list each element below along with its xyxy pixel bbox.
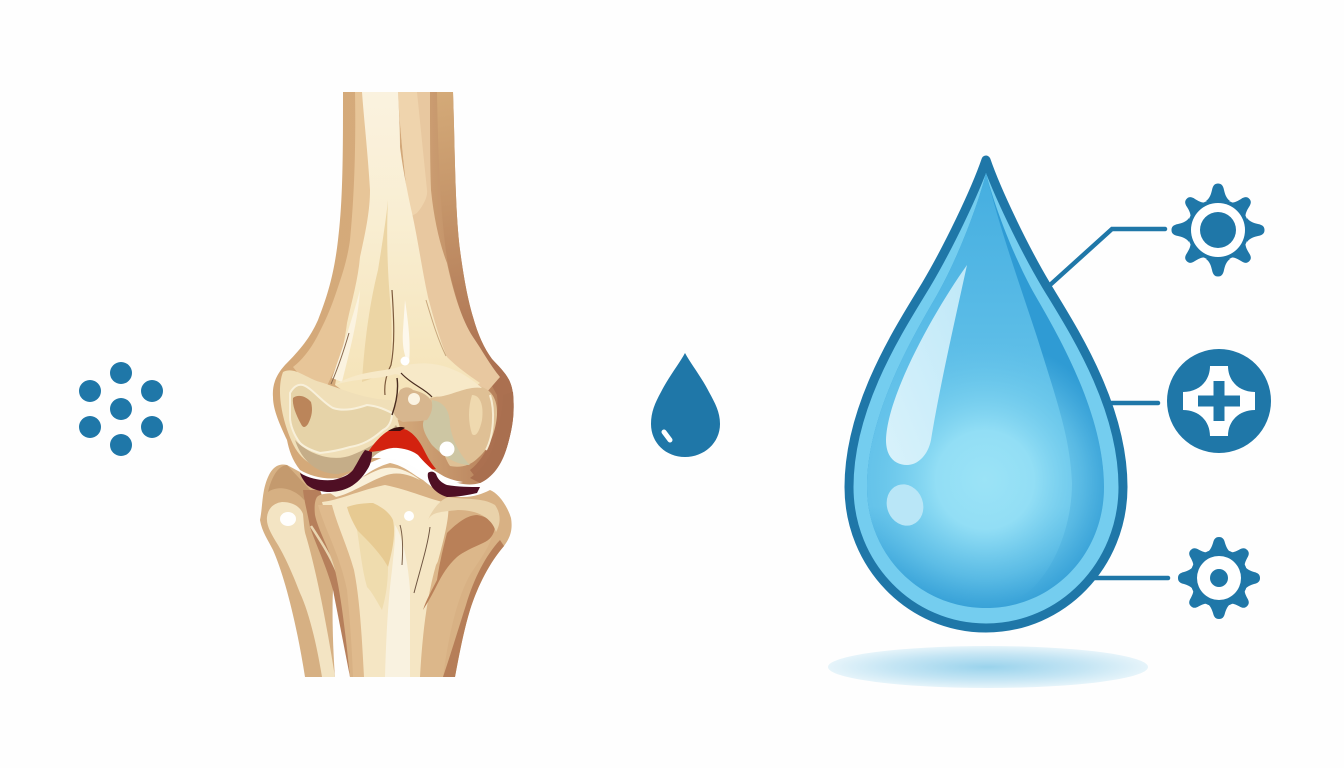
tibia cream body — [322, 485, 448, 677]
left condyle pad — [290, 385, 392, 453]
patella bump — [393, 387, 432, 422]
femur pale streak — [403, 300, 410, 362]
tibia top rim highlight — [330, 468, 420, 497]
icon: gear with solid centre — [1172, 184, 1264, 276]
large water drop — [845, 160, 1125, 628]
drop central glow — [878, 366, 1104, 608]
tibia left tan band — [318, 505, 364, 677]
fibula base — [260, 464, 345, 677]
right condyle brown outer — [470, 392, 514, 483]
knee joint illustration — [260, 92, 514, 677]
femur central tan streak — [362, 200, 392, 382]
cartilage: right dark band — [428, 472, 480, 497]
connector lines — [1050, 229, 1168, 578]
tibia brown patch — [423, 515, 495, 610]
icon: small water drop — [651, 353, 720, 457]
tibia upper yellow patch — [347, 503, 394, 567]
femur — [273, 92, 514, 484]
right condyle grey pad — [423, 400, 470, 465]
fibula head rim — [268, 465, 312, 500]
left condyle brown spot — [293, 396, 312, 427]
light sliver — [311, 526, 337, 572]
icon: cluster of dots — [79, 362, 163, 456]
drop mid-tone — [867, 173, 1072, 608]
tibia central light strip — [385, 525, 410, 677]
femur upper right pale band — [398, 92, 427, 217]
tibia fine lines — [400, 525, 403, 565]
fibula cream strip — [267, 502, 335, 677]
femur outer shell — [273, 92, 514, 484]
icon: medical cross badge — [1167, 349, 1271, 453]
white gap — [333, 590, 350, 677]
bubble on drop — [881, 479, 929, 531]
femur fine lines — [331, 333, 349, 384]
icon: gear with ring centre — [1178, 537, 1260, 619]
tibia outer right shade — [443, 540, 504, 677]
infographic canvas — [79, 92, 1271, 688]
tibia main — [315, 463, 512, 677]
fibula highlight — [280, 512, 296, 526]
femur right band — [398, 92, 500, 400]
brown between bones — [303, 490, 350, 677]
highlight on drop — [886, 265, 967, 465]
tibia lower pale patch — [357, 530, 388, 610]
cartilage damage: red — [368, 428, 436, 470]
tibia and fibula — [260, 463, 512, 677]
cartilage: left dark band — [300, 450, 372, 492]
femur left inner band — [293, 92, 375, 400]
drop inner body — [867, 173, 1104, 608]
femur centre ridge cream — [335, 363, 482, 397]
shadow under drop — [828, 646, 1148, 688]
left condyle ring — [280, 370, 400, 470]
right condyle tan — [430, 386, 497, 467]
femur cream centre — [335, 92, 480, 420]
right condyle highlight — [469, 395, 483, 435]
worn white gap — [372, 448, 463, 483]
tibia right band — [420, 525, 493, 677]
femur right shade — [437, 92, 514, 483]
